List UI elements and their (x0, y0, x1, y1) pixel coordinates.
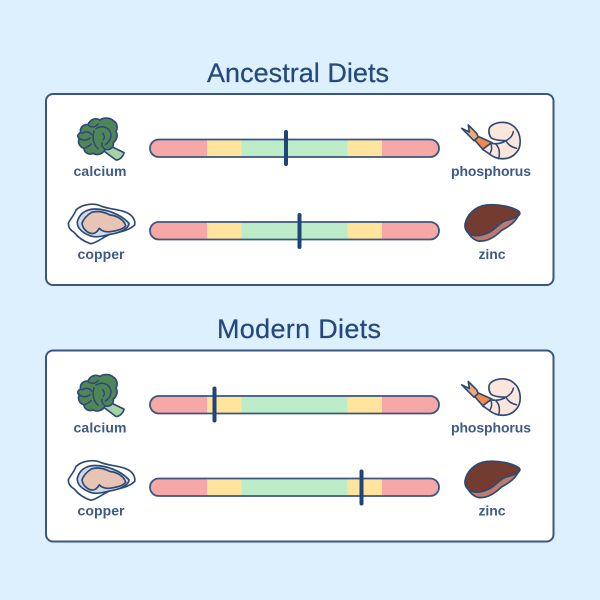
icon: shrimp (phosphorus) (462, 379, 520, 415)
label: copper: copper (78, 246, 125, 262)
bar: calcium scale (150, 130, 439, 166)
panel: ancestral diets (46, 94, 554, 285)
bar: copper scale (150, 213, 439, 249)
label: calcium: calcium (74, 420, 126, 436)
marker: copper value (298, 213, 302, 249)
label: phosphorus: phosphorus (451, 420, 531, 436)
label: calcium: calcium (74, 163, 126, 179)
icon: broccoli (calcium) (78, 375, 124, 416)
icon: broccoli (calcium) (78, 118, 124, 160)
panel: modern diets (46, 350, 554, 542)
icon: liver (zinc) (465, 461, 520, 498)
marker: copper value (360, 470, 364, 506)
bar: copper scale (150, 470, 439, 506)
bar: calcium scale (150, 386, 439, 422)
title: Ancestral Diets: Ancestral Diets (207, 58, 389, 88)
marker: calcium value (212, 386, 216, 422)
label: zinc: zinc (478, 502, 506, 518)
title: Modern Diets: Modern Diets (217, 314, 381, 344)
icon: shrimp (phosphorus) (462, 122, 520, 159)
label: copper: copper (78, 502, 125, 518)
label: phosphorus: phosphorus (451, 163, 531, 179)
icon: liver (zinc) (465, 205, 520, 241)
icon: oyster (copper) (68, 461, 135, 500)
icon: oyster (copper) (68, 204, 135, 244)
label: zinc: zinc (478, 246, 506, 262)
marker: calcium value (284, 130, 288, 166)
